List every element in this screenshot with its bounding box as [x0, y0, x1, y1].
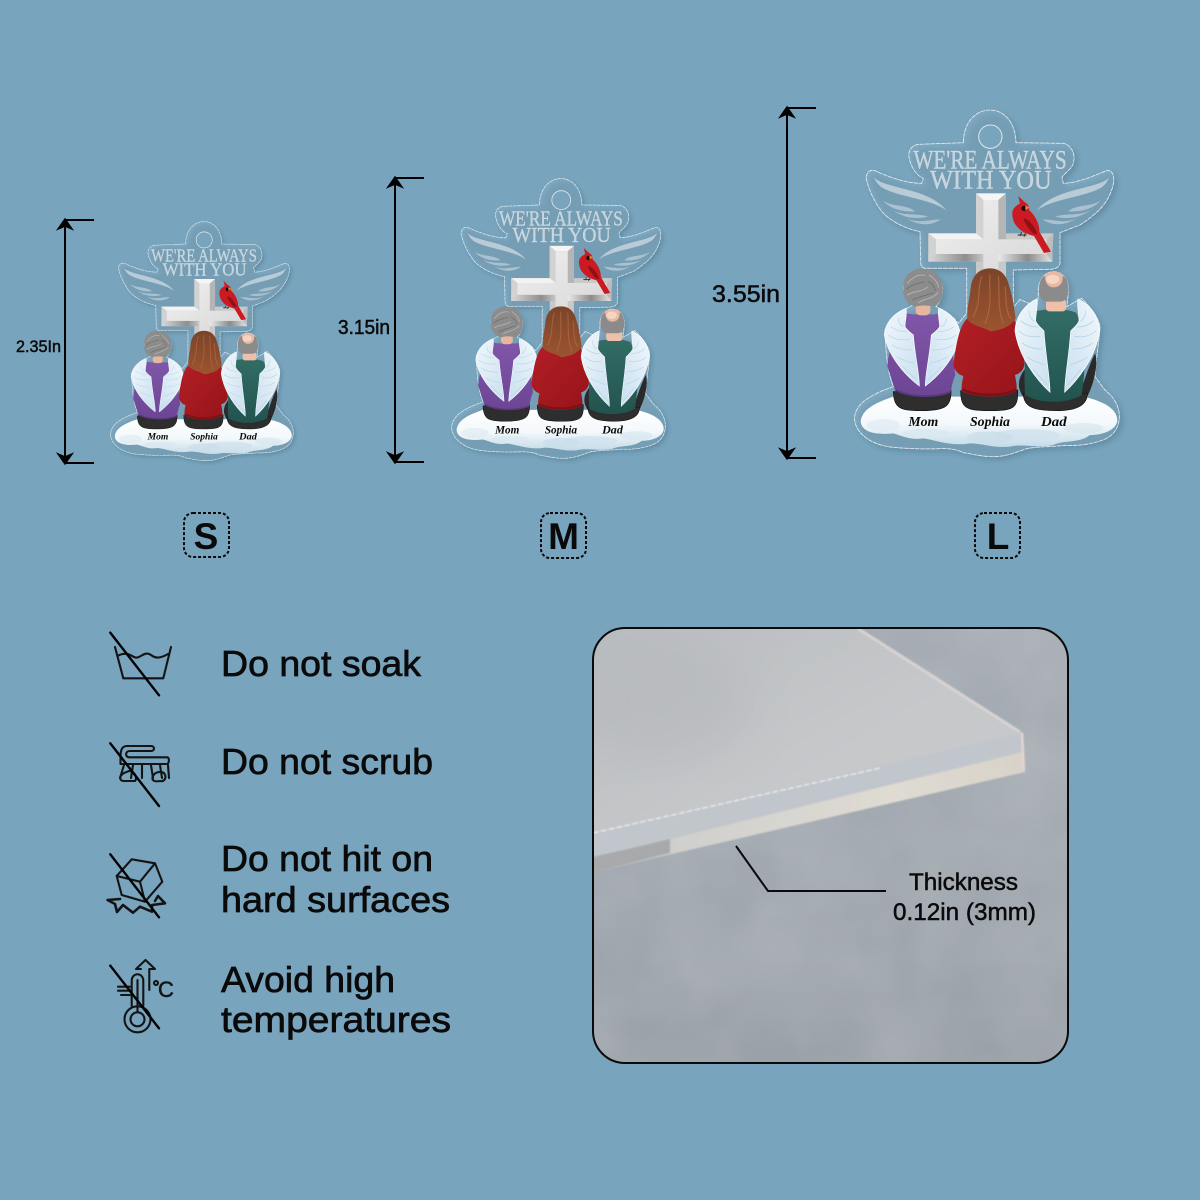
ornament artwork: medium: [452, 179, 668, 461]
name labels: medium: Mom: [494, 425, 520, 437]
ornament: medium: [452, 179, 668, 461]
name labels: small: Mom: [147, 432, 169, 443]
care text: avoid high temperatures: temperatures: [221, 999, 451, 1040]
name labels: medium: [494, 425, 623, 437]
name labels: large: Sophia: [970, 415, 1010, 430]
care text: do not hit on hard surfaces: Do not hit on: [221, 838, 433, 879]
name labels: small: [147, 432, 257, 443]
size badge: S: [184, 513, 229, 557]
ornament artwork: large: [855, 110, 1122, 460]
icon: do not hit on hard surfaces: [108, 854, 165, 917]
icon: do not scrub: [110, 743, 169, 806]
ornament headline: large: [913, 144, 1067, 194]
care text: do not hit on hard surfaces: [221, 838, 450, 920]
thickness label: 0.12in (3mm): [893, 899, 1036, 926]
name labels: medium: Dad: [601, 425, 623, 437]
icon: avoid high temperatures: C: [158, 977, 174, 1002]
name labels: small: Sophia: [190, 432, 218, 443]
dimension label: 3.55in: 3.55in: [712, 281, 780, 308]
photo background: [593, 628, 1068, 1063]
ornament headline: medium: WE'RE ALWAYS: [499, 207, 623, 231]
name labels: large: Dad: [1040, 415, 1068, 430]
care text: do not soak: Do not soak: [221, 643, 422, 684]
ornament artwork: small: [111, 222, 295, 463]
name labels: medium: Sophia: [545, 425, 577, 437]
care text: do not scrub: Do not scrub: [221, 741, 433, 782]
ornament headline: medium: [499, 207, 623, 247]
thickness leader line: [736, 846, 886, 891]
care text: do not hit on hard surfaces: hard surfaces: [221, 879, 450, 920]
dimension arrow: small height: [58, 219, 94, 464]
name labels: small: Dad: [238, 432, 257, 443]
dimension arrow: large height: [780, 107, 816, 459]
icon: do not soak: [110, 633, 171, 695]
name labels: large: Mom: [907, 415, 938, 430]
ornament headline: small: WE'RE ALWAYS: [151, 246, 257, 266]
ornament headline: small: [151, 246, 257, 280]
size badge: M: M: [548, 516, 579, 557]
thickness label: [893, 869, 1036, 926]
size badge: L: L: [987, 516, 1009, 557]
panel: acrylic thickness photo: [570, 625, 1068, 1063]
care text: avoid high temperatures: [221, 959, 451, 1040]
ornament: large: [855, 110, 1122, 460]
care text: avoid high temperatures: Avoid high: [221, 959, 395, 1000]
acrylic slab: [570, 625, 1025, 873]
name labels: large: [907, 415, 1068, 430]
ornament headline: large: WITH YOU: [930, 164, 1052, 194]
ornament headline: medium: WITH YOU: [513, 223, 611, 247]
thickness label: Thickness: [909, 869, 1018, 896]
icon: avoid high temperatures: [110, 960, 174, 1032]
size badge: M: [541, 513, 586, 558]
size badge: S: S: [194, 516, 218, 557]
dimension arrow: medium height: [388, 177, 424, 463]
ornament headline: small: WITH YOU: [163, 260, 247, 280]
ornament: small: [111, 222, 295, 463]
dimension label: 2.35in: 2.35In: [16, 337, 61, 356]
ornament headline: large: WE'RE ALWAYS: [913, 144, 1067, 174]
dimension label: 3.15in: 3.15in: [338, 317, 390, 339]
size badge: L: [975, 513, 1020, 558]
